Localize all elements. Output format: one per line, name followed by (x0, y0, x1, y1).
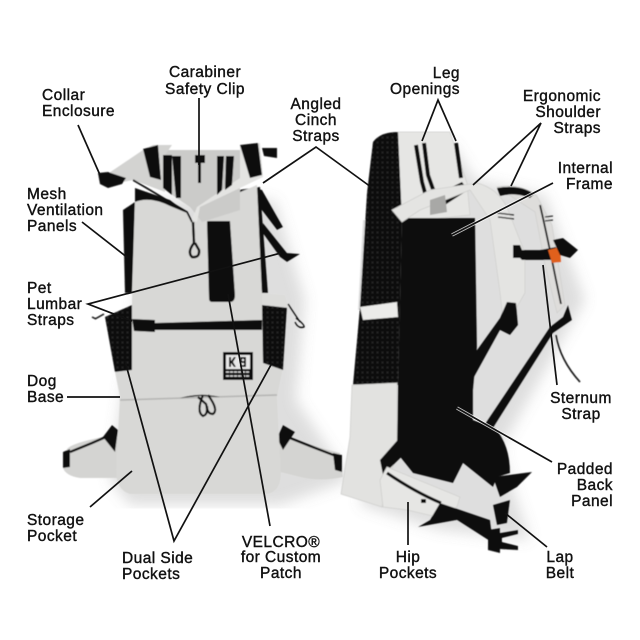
leader: Padded Back Panel (457, 408, 552, 462)
label: Carabiner Safety Clip: Carabiner (169, 64, 241, 81)
mesh column (353, 132, 402, 385)
pocket seam and zip (120, 395, 277, 416)
main panel (115, 185, 283, 494)
label: Mesh Ventilation Panels: Panels (27, 218, 77, 235)
front view backpack (63, 143, 350, 505)
leader: Carabiner Safety Clip (198, 98, 200, 165)
label: VELCRO for Custom Patch: VELCRO® (242, 534, 320, 551)
label: Angled Cinch Straps: Cinch (295, 112, 337, 129)
gathered pocket top right (262, 293, 289, 308)
label: Padded Back Panel: Panel (571, 493, 613, 510)
lumbar strap (92, 304, 304, 332)
leader: Pet Lumbar Straps (88, 253, 281, 321)
label: Sternum Strap: Sternum (550, 390, 612, 407)
label: Angled Cinch Straps: Angled (291, 96, 341, 113)
black back panel (397, 218, 510, 487)
label: Padded Back Panel: Padded (557, 461, 613, 478)
lap belt and buckle (418, 472, 532, 553)
leader: Leg Openings (422, 100, 456, 141)
white band (360, 302, 398, 320)
label: Storage Pocket: Pocket (27, 528, 77, 545)
leader: VELCRO (228, 294, 270, 526)
shadow: front pack (110, 200, 350, 505)
label: Mesh Ventilation Panels: Mesh (27, 186, 67, 203)
leader: Dual Side Pockets (125, 361, 272, 541)
lower white body (341, 383, 397, 507)
top white fabric (392, 132, 470, 222)
label: Lap Belt: Belt (546, 565, 574, 582)
hip wings (63, 425, 343, 480)
leader: Angled Cinch Straps (263, 147, 371, 187)
label: Leg Openings: Leg (433, 65, 460, 82)
label: Pet Lumbar Straps: Lumbar (27, 296, 82, 313)
label: Hip Pockets: Hip (396, 549, 420, 566)
label: Pet Lumbar Straps: Straps (27, 312, 74, 329)
label: Carabiner Safety Clip: Safety Clip (165, 81, 245, 98)
hip pocket (380, 467, 460, 517)
label: Sternum Strap: Strap (561, 406, 601, 423)
leg opening straps (416, 143, 461, 200)
second shoulder strap (497, 186, 565, 313)
velcro patch (207, 221, 235, 302)
leader: Mesh Ventilation Panels (82, 222, 128, 258)
label: Internal Frame: Frame (566, 176, 613, 193)
side mesh right (262, 305, 287, 370)
collar (98, 143, 277, 222)
leader: Storage Pocket (90, 471, 132, 507)
label: Collar Enclosure: Enclosure (42, 103, 115, 120)
sternum buckle (513, 238, 578, 263)
label: Collar Enclosure: Collar (42, 87, 85, 104)
leader: Sternum Strap (543, 265, 557, 385)
label: VELCRO for Custom Patch: Patch (260, 565, 302, 582)
label: Mesh Ventilation Panels: Ventilation (27, 202, 103, 219)
label: Dog Base: Dog (27, 373, 57, 390)
label: Storage Pocket: Storage (27, 512, 84, 529)
label: Ergonomic Shoulder Straps: Ergonomic (523, 88, 601, 105)
label: Ergonomic Shoulder Straps: Straps (554, 120, 601, 137)
side view backpack (341, 132, 585, 553)
label: Hip Pockets: Pockets (379, 565, 437, 582)
leader: Lap Belt (505, 513, 547, 547)
label: Dual Side Pockets: Dual Side (122, 550, 193, 567)
pale edge beside mesh (358, 220, 367, 310)
label: Internal Frame: Internal (558, 160, 613, 177)
carabiner clip (195, 155, 205, 183)
leader: Collar Enclosure (78, 125, 100, 175)
label: Angled Cinch Straps: Straps (292, 128, 340, 145)
label: Dual Side Pockets: Pockets (122, 566, 180, 583)
label: Leg Openings: Openings (390, 81, 460, 98)
leader: Ergonomic Shoulder Straps (473, 123, 541, 186)
leader: Hip Pockets (407, 502, 409, 545)
leader: Dog Base (67, 396, 120, 398)
leader: Internal Frame (452, 183, 553, 235)
rear straps (123, 187, 300, 293)
zipper pull (190, 222, 199, 257)
label: Dog Base: Base (27, 389, 64, 406)
label: Ergonomic Shoulder Straps: Shoulder (535, 104, 601, 121)
side mesh left (105, 305, 132, 372)
shadow: side pack (360, 140, 585, 540)
label: Lap Belt: Lap (546, 549, 574, 566)
label: Pet Lumbar Straps: Pet (27, 280, 52, 297)
K9 logo (223, 352, 253, 380)
webbing straps (380, 302, 580, 475)
label: VELCRO for Custom Patch: for Custom (241, 549, 321, 566)
first shoulder strap (392, 183, 553, 320)
label: Padded Back Panel: Back (577, 477, 613, 494)
